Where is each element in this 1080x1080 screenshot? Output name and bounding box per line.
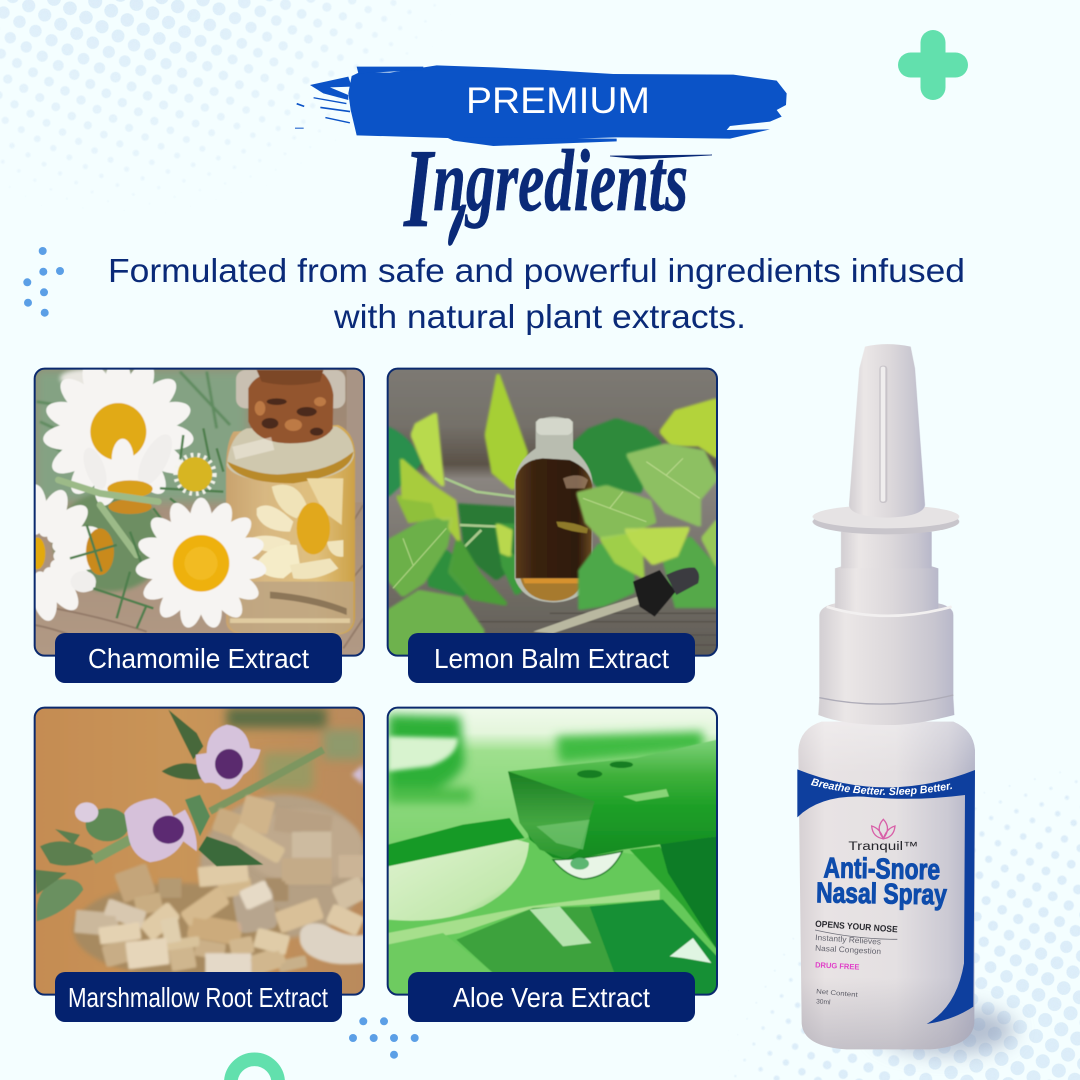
title: Ingredients <box>403 127 712 251</box>
bottle body: Nasal Congestion <box>815 944 881 956</box>
bottle body: DRUG FREE <box>815 960 860 972</box>
bottle body: Anti-Snore <box>823 852 940 886</box>
subtitle text: with natural plant extracts. <box>333 298 746 335</box>
spray nozzle and cap <box>813 344 959 725</box>
halftone dots: top left <box>0 0 435 195</box>
bottle body: Tranquil™ <box>848 839 918 853</box>
bottle body <box>797 682 975 1050</box>
icon: green ring <box>231 1059 278 1080</box>
panel: lemon balm photo <box>383 365 723 665</box>
banner text: PREMIUM <box>466 80 650 121</box>
bottle body: Instantly Relieves <box>815 933 881 947</box>
subtitle text <box>108 252 965 335</box>
heading banner: brush stroke with PREMIUM <box>295 65 787 146</box>
label: Lemon Balm Extract: Lemon Balm Extract <box>434 643 669 674</box>
label: Marshmallow Root Extract <box>55 972 342 1022</box>
bottle body: Net Content <box>816 988 858 999</box>
label: Marshmallow Root Extract: Marshmallow Root Extract <box>68 982 328 1013</box>
bottle body: Breathe Better. Sleep Better. <box>810 778 952 796</box>
title: Ingredients: ngredients <box>433 133 688 230</box>
subtitle text: Formulated from safe and powerful ingredients infused <box>108 252 965 289</box>
panel: chamomile photo <box>0 356 370 665</box>
label: Chamomile Extract: Chamomile Extract <box>88 643 309 674</box>
product: nasal spray bottle <box>797 344 1022 1064</box>
label: Lemon Balm Extract <box>408 633 695 683</box>
panel: aloe vera photo <box>383 703 723 1003</box>
bottle body: 30ml <box>816 998 831 1006</box>
title: Ingredients: I <box>403 127 435 251</box>
bottle body: OPENS YOUR NOSE <box>815 919 898 934</box>
label: Aloe Vera Extract <box>408 972 695 1022</box>
dots cluster: left <box>23 247 64 317</box>
bottle body: Nasal Spray <box>816 877 947 911</box>
panel: marshmallow root photo <box>30 703 370 1003</box>
halftone dots: bottom right <box>734 772 1080 1080</box>
label: Aloe Vera Extract: Aloe Vera Extract <box>453 982 650 1013</box>
icon: green plus <box>910 42 956 88</box>
label: Chamomile Extract <box>55 633 342 683</box>
dots cluster: bottom <box>349 1017 419 1059</box>
